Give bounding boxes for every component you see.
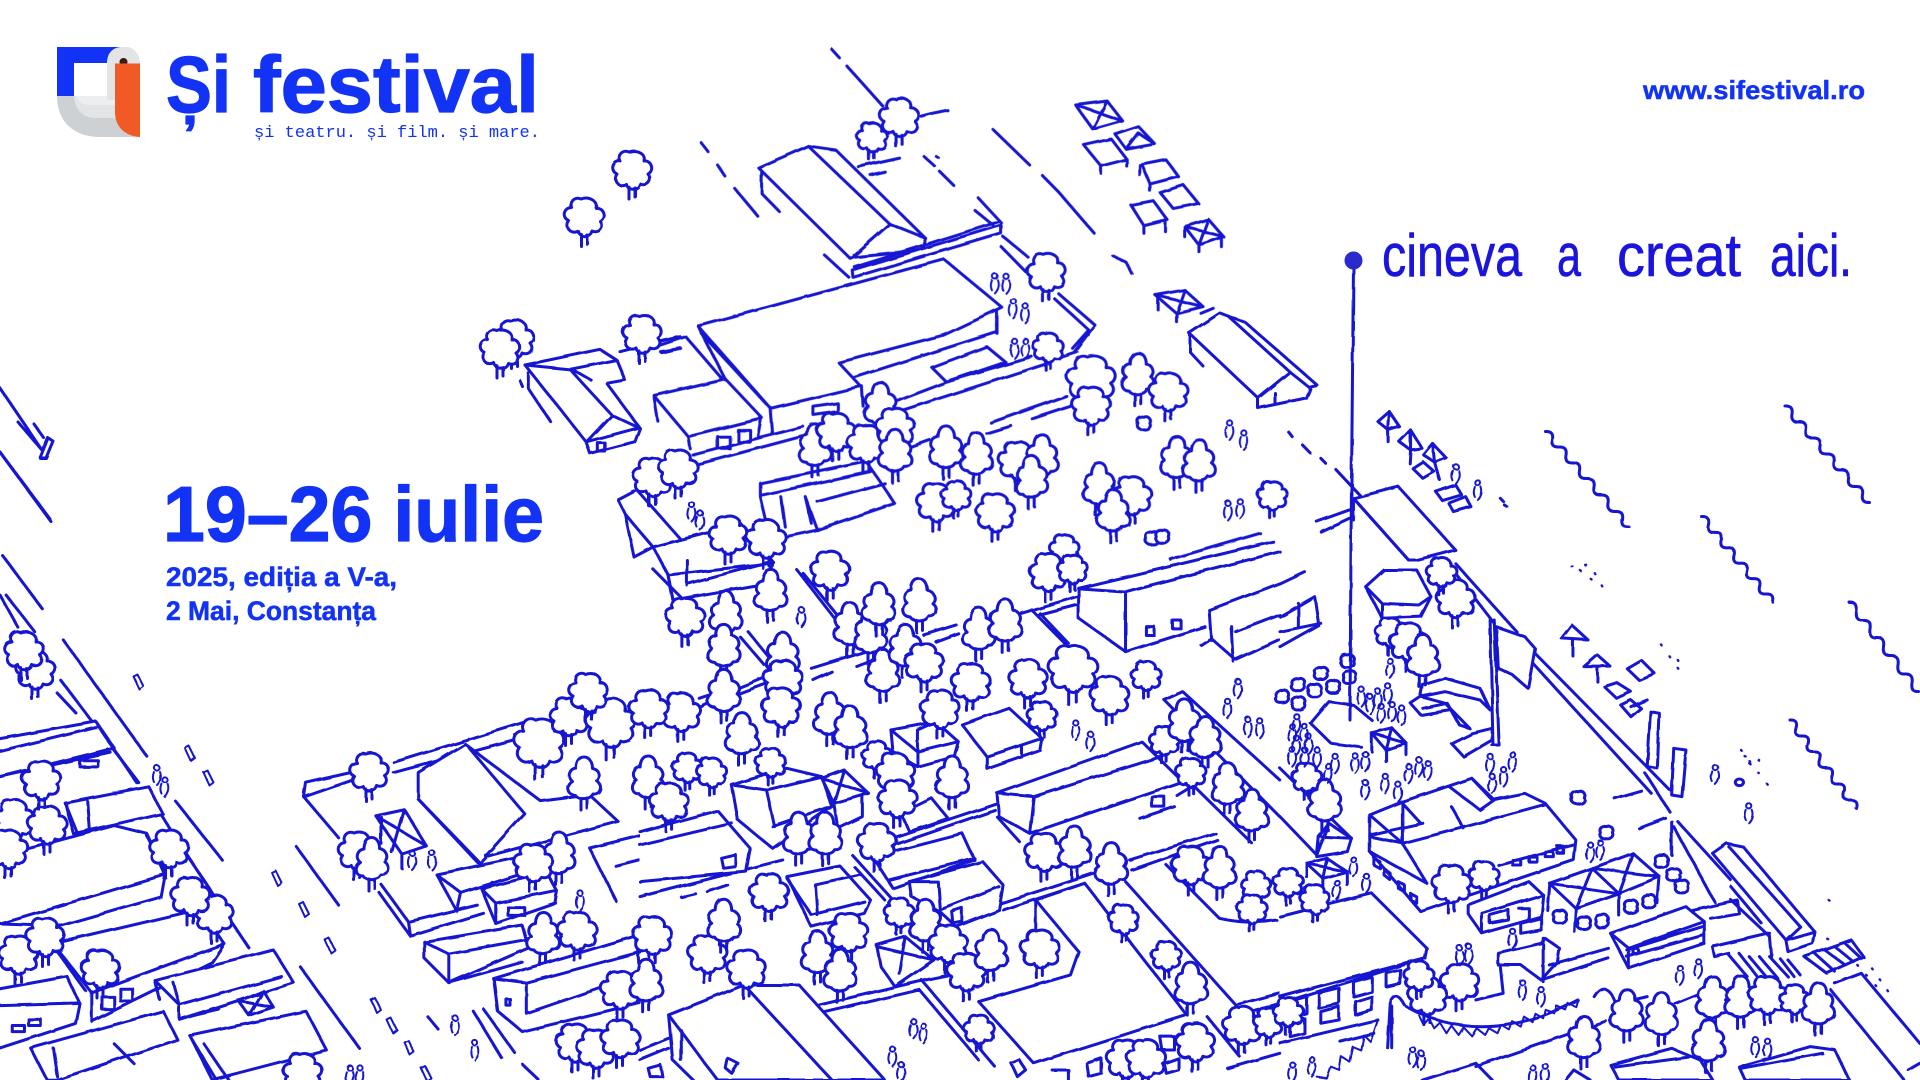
small bushes and people	[991, 274, 1248, 544]
road lines to the trees	[911, 396, 1260, 559]
arches and bunting	[1317, 989, 1617, 1078]
market tents	[1076, 101, 1223, 322]
umbrellas on the beach	[1562, 625, 1686, 812]
food booth	[1610, 907, 1704, 968]
block of houses right of the road	[304, 722, 640, 1032]
logo wordmark: festival	[253, 40, 539, 129]
upper-left house with trees	[519, 337, 680, 453]
tagline: și teatru. și film. și mare.	[254, 124, 540, 143]
sea waves	[1545, 406, 1919, 808]
house with pavilion	[732, 768, 868, 848]
pin line	[1350, 265, 1354, 720]
ground trees	[1273, 558, 1835, 1072]
far left road edges	[0, 388, 53, 519]
hexagonal pavilion	[1366, 570, 1431, 618]
road lines	[0, 452, 539, 1080]
date heading: 19–26 iulie	[163, 470, 544, 558]
trees over the left block	[0, 632, 640, 1080]
website: www.sifestival.ro	[1642, 75, 1865, 105]
left houses	[0, 722, 326, 1080]
edition and location: 2025, ediția a V-a,	[166, 562, 397, 592]
crowd plaza	[1311, 702, 1406, 762]
steps and pier	[1692, 887, 1863, 978]
small tent	[901, 798, 948, 832]
bottom walls and houses	[1423, 993, 1849, 1080]
curved benches	[1411, 678, 1492, 757]
edition and location: 2 Mai, Constanța	[166, 596, 377, 626]
lower twin house	[760, 462, 895, 540]
central blocks	[629, 542, 1284, 1080]
flag and pole	[1490, 620, 1535, 745]
logo wordmark: Și	[166, 40, 231, 131]
long left hall	[648, 985, 885, 1080]
stage details	[1280, 603, 1321, 632]
long building	[640, 811, 750, 882]
house by the dune	[1189, 313, 1317, 408]
small bus	[1468, 882, 1543, 933]
right road and festival grounds: upper	[1288, 412, 1507, 560]
festival crowd	[1288, 659, 1771, 1080]
beach people and ball	[1712, 765, 1753, 823]
pin dot	[1344, 252, 1362, 270]
edition and location	[166, 562, 397, 626]
walls and lanes	[640, 560, 1280, 1068]
beach umbrellas and loungers	[1378, 412, 1507, 512]
long centre building	[997, 742, 1252, 843]
roof details	[519, 337, 680, 451]
central trees	[629, 552, 1284, 1080]
people in central blocks	[797, 607, 1264, 1080]
gazebo	[877, 937, 934, 987]
handwritten slogan: a	[1557, 222, 1581, 289]
map: left street and houses	[0, 452, 640, 1080]
roadside gable and tent	[1307, 823, 1351, 892]
logo mark: pelican	[57, 47, 140, 137]
handwritten slogan: aici.	[1770, 222, 1852, 289]
path dashes	[1288, 432, 1360, 532]
top-centre buildings	[654, 49, 1288, 571]
park trees	[799, 98, 1288, 571]
lane dashes	[133, 674, 431, 1080]
handwritten slogan	[1382, 222, 1852, 289]
gabled house and porch house	[618, 490, 774, 600]
stacked houses	[787, 833, 1003, 927]
stage hall	[1370, 778, 1576, 912]
windows of the large block	[1011, 1037, 1179, 1080]
stage block	[1280, 597, 1319, 647]
festival grounds: lower	[1273, 558, 1920, 1080]
handwritten slogan: creat	[1617, 222, 1741, 289]
gabled hall	[758, 146, 926, 258]
bushes and picnic blankets	[1276, 654, 1688, 929]
double tent	[1547, 853, 1659, 932]
road dashes	[701, 49, 1132, 277]
promenade lines	[1280, 563, 1920, 1080]
side house	[654, 326, 807, 465]
boundary wall	[852, 225, 1001, 277]
entrance gate	[1476, 938, 1608, 1000]
large hall	[698, 259, 1048, 433]
handwritten slogan: cineva	[1382, 222, 1523, 289]
scattered top trees	[481, 151, 786, 568]
large block with windows	[1280, 893, 1427, 1043]
sand dots	[1572, 565, 1892, 997]
pavilion by the road	[1353, 487, 1455, 560]
row house right	[1079, 542, 1280, 662]
wall details	[854, 198, 1095, 358]
two small houses	[891, 708, 1042, 768]
long beach hut	[1712, 843, 1814, 952]
L-shaped yard	[979, 883, 1187, 1063]
